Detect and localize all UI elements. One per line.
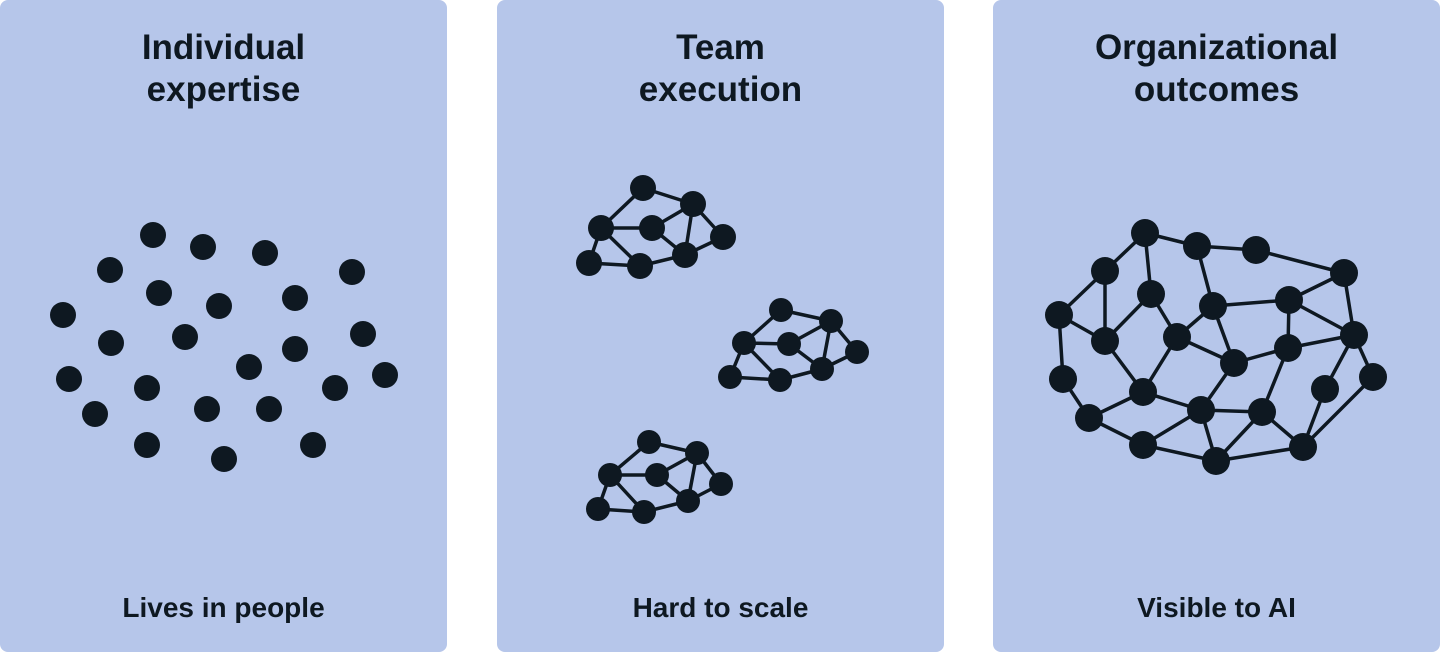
panel: organizational outcomes (993, 0, 1440, 652)
subtitle: hard to scale: Hard to scale (633, 592, 808, 623)
title: team execution: execution (639, 70, 802, 109)
title: individual expertise: Individual (142, 28, 305, 67)
scattered dots (50, 222, 398, 472)
title: organizational outcomes: outcomes (1134, 70, 1299, 109)
panel: individual expertise (0, 0, 447, 652)
title: individual expertise: expertise (147, 70, 300, 109)
subtitle: visible to AI: Visible to AI (1137, 592, 1296, 623)
clustered networks (576, 175, 869, 524)
subtitle: lives in people: Lives in people (122, 592, 325, 623)
title: organizational outcomes: Organizational (1095, 28, 1338, 67)
connected network (1045, 219, 1387, 475)
title: individual expertise (142, 28, 305, 109)
title: team execution (639, 28, 802, 109)
title: organizational outcomes (1095, 28, 1338, 109)
panel: team execution (497, 0, 944, 652)
title: team execution: Team (676, 28, 765, 67)
